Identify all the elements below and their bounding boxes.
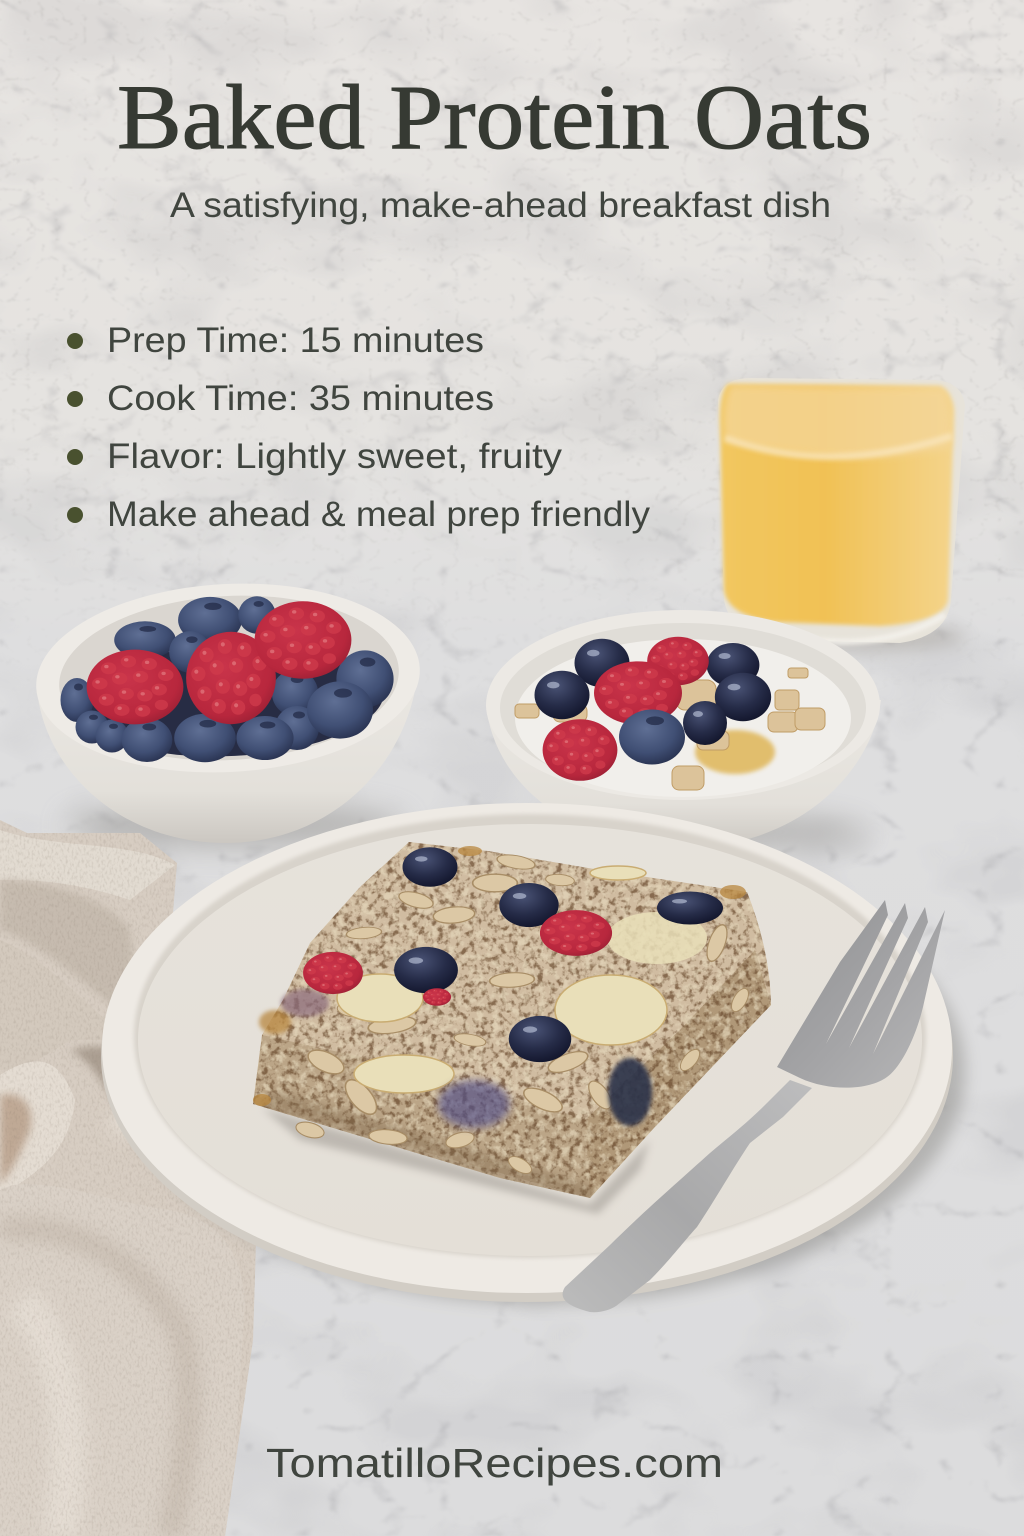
subtitle: A satisfying, make-ahead breakfast dish xyxy=(170,186,831,225)
plate xyxy=(101,803,965,1304)
feature list xyxy=(67,321,651,534)
bowl of berries xyxy=(31,574,425,847)
yogurt bowl berries xyxy=(534,637,771,781)
juice glass xyxy=(718,378,965,652)
footer website: TomatilloRecipes.com xyxy=(266,1440,723,1486)
bullet: prep time: Prep Time: 15 minutes xyxy=(107,321,484,360)
bananas xyxy=(337,866,707,1093)
napkin xyxy=(0,820,256,1536)
bullet: flavor: Flavor: Lightly sweet, fruity xyxy=(107,437,563,476)
oat flakes xyxy=(294,852,752,1177)
blueberries in bowl xyxy=(60,596,394,762)
toasted edges xyxy=(253,846,746,1106)
fork xyxy=(563,900,945,1312)
oat bar xyxy=(240,830,780,1214)
fork head xyxy=(777,900,945,1088)
honey xyxy=(695,730,775,774)
bullet: make ahead: Make ahead & meal prep friendly xyxy=(107,495,651,534)
bar berries xyxy=(281,847,723,1128)
bullet: cook time: Cook Time: 35 minutes xyxy=(107,379,494,418)
granola clusters xyxy=(515,668,825,790)
bowl of yogurt xyxy=(486,610,881,852)
title: Baked Protein Oats xyxy=(117,66,872,168)
fork handle xyxy=(563,1080,812,1312)
raspberries in bowl xyxy=(87,601,351,724)
